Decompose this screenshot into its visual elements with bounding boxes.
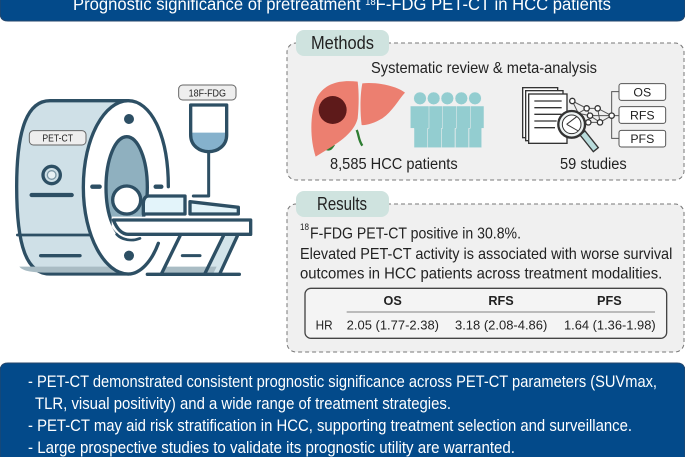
results text: F-FDG PET-CT positive in 30.8%. [310, 225, 521, 242]
results text: outcomes in HCC patients across treatment modalities. [300, 265, 662, 282]
conclusion text: TLR, visual positivity) and a wide range of treatment strategies. [35, 394, 451, 413]
tracer IV bag [191, 105, 227, 196]
label: 18F-FDG: 18F-FDG [189, 88, 226, 99]
hazard ratio table [305, 288, 667, 338]
hazard ratio table: 3.18 (2.08-4.86) [455, 318, 547, 333]
methods heading [296, 30, 389, 56]
conclusion text: - Large prospective studies to validate its prognostic utility are warranted. [28, 438, 515, 457]
conclusion text [28, 372, 657, 457]
panel: methods [287, 30, 684, 180]
hazard ratio table: PFS [597, 294, 622, 308]
results heading: Results [317, 194, 367, 214]
icon: patient group [410, 92, 484, 148]
panel: conclusions [0, 363, 685, 457]
patient count: 8,585 HCC patients [330, 156, 458, 173]
results text [300, 222, 672, 338]
panel: results [287, 191, 684, 352]
hazard ratio table: 1.64 (1.36-1.98) [564, 318, 656, 333]
outcome boxes: PFS [630, 132, 654, 146]
results text: 18 [300, 222, 309, 232]
hazard ratio table: OS [384, 294, 402, 308]
scanner front ring [83, 101, 168, 274]
hazard ratio table: 2.05 (1.77-2.38) [347, 318, 439, 333]
outcome boxes: RFS [630, 108, 655, 122]
methods heading: Methods [311, 33, 374, 53]
scanner body [17, 101, 128, 274]
results heading [296, 191, 389, 217]
study count: 59 studies [560, 156, 627, 173]
hazard ratio table: RFS [488, 294, 514, 308]
title banner [0, 0, 685, 21]
hazard ratio table: HR [316, 318, 333, 333]
label: PET-CT: PET-CT [42, 133, 74, 144]
label: 18F-FDG [179, 85, 236, 100]
patient table with legs [113, 196, 251, 274]
label: PET-CT [29, 131, 86, 145]
outcome boxes [619, 84, 666, 147]
illustration: PET-CT scanner with tracer bag [17, 85, 251, 274]
icon: liver with tumour [311, 81, 405, 157]
methods subtitle: Systematic review & meta-analysis [371, 60, 597, 77]
icon: documents, magnifier and network [523, 88, 619, 152]
outcome boxes: OS [633, 85, 651, 99]
methods artwork [311, 81, 666, 173]
